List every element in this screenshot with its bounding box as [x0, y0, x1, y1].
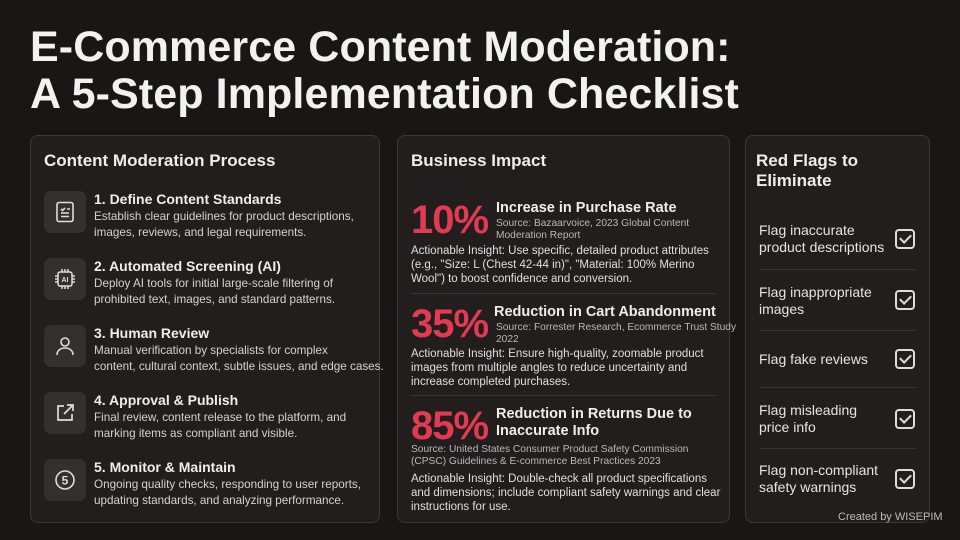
stat 35% [411, 302, 736, 388]
title [30, 23, 739, 118]
stat 85%: Actionable Insight: Double-check all product specifications [411, 473, 707, 485]
heading: impact: Business Impact [411, 151, 546, 170]
icon: circled 5: 5 [62, 474, 69, 488]
stat 85% [411, 404, 720, 513]
step 1: images, reviews, and legal requirements. [94, 226, 306, 238]
icon: person [44, 325, 86, 367]
title: E-Commerce Content Moderation: [30, 23, 731, 71]
step 4: 4. Approval & Publish [94, 392, 238, 408]
heading: process: Content Moderation Process [44, 151, 275, 170]
flag 2: images [759, 301, 804, 317]
stat 85%: instructions for use. [411, 501, 511, 513]
flag 2: Flag inappropriate [759, 284, 872, 300]
panel: business impact [397, 135, 730, 523]
step 5: Ongoing quality checks, responding to user reports, [94, 478, 361, 491]
panel: content moderation process [30, 135, 380, 523]
step 1: 1. Define Content Standards [94, 191, 281, 207]
heading: red flags: Red Flags to [756, 151, 858, 170]
step 2: Deploy AI tools for initial large-scale filtering of [94, 277, 333, 290]
flag 3 [759, 349, 915, 369]
step 3 [44, 325, 384, 372]
step 4 [44, 392, 346, 440]
step 2: prohibited text, images, and standard patterns. [94, 292, 335, 306]
stat 35%: Source: Forrester Research, Ecommerce Trust Study [496, 322, 736, 333]
stat 10%: 10% [411, 198, 488, 242]
flag 4 [759, 402, 915, 435]
stat 85%: Reduction in Returns Due to [496, 406, 692, 422]
step 5: 5. Monitor & Maintain [94, 459, 236, 475]
flag 1: product descriptions [759, 239, 884, 255]
step 3: 3. Human Review [94, 325, 209, 341]
step 1 [44, 191, 354, 238]
stat 10%: Actionable Insight: Use specific, detailed product attributes [411, 245, 709, 257]
icon: AI chip: AI [62, 277, 69, 284]
flag 5 [759, 462, 915, 495]
stat 35%: Reduction in Cart Abandonment [494, 304, 716, 320]
step 3: content, cultural context, subtle issues, and edge cases. [94, 360, 384, 372]
icon: external link [44, 392, 86, 434]
step 5 [44, 459, 361, 506]
stat 10%: Moderation Report [496, 230, 580, 241]
flag 1 [759, 222, 915, 255]
flag 4: price info [759, 419, 816, 435]
step 4: marking items as compliant and visible. [94, 426, 297, 440]
step 2: 2. Automated Screening (AI) [94, 258, 281, 274]
credit: Created by WISEPIM [838, 511, 943, 523]
step 3: Manual verification by specialists for complex [94, 344, 328, 357]
stat 10%: Increase in Purchase Rate [496, 200, 677, 216]
step 1: Establish clear guidelines for product descriptions, [94, 210, 354, 223]
stat 35%: Actionable Insight: Ensure high-quality, zoomable product [411, 348, 704, 360]
heading: red flags [756, 151, 858, 190]
flag 5: safety warnings [759, 479, 856, 495]
stat 35%: 2022 [496, 334, 519, 345]
step 2 [44, 258, 335, 306]
stat 10%: Wool") to boost confidence and conversion. [411, 273, 632, 285]
stat 35%: images from multiple angles to reduce uncertainty and [411, 362, 687, 374]
title: A 5-Step Implementation Checklist [30, 70, 739, 118]
flag 4: Flag misleading [759, 402, 857, 418]
stat 35%: increase completed purchases. [411, 376, 570, 388]
stat 10% [411, 198, 709, 285]
stat 85%: Inaccurate Info [496, 423, 599, 439]
flag 3: Flag fake reviews [759, 351, 868, 367]
icon: circled 5 [44, 459, 86, 501]
flag 5: Flag non-compliant [759, 462, 878, 478]
stat 10%: Source: Bazaarvoice, 2023 Global Content [496, 218, 689, 229]
stat 85%: Source: United States Consumer Product Safety Commission [411, 444, 688, 455]
stat 10%: (e.g., "Size: L (Chest 42-44 in)", "Material: 100% Merino [411, 259, 694, 271]
flag 2 [759, 284, 915, 317]
flag 1: Flag inaccurate [759, 222, 855, 238]
stat 85%: 85% [411, 404, 488, 448]
step 4: Final review, content release to the platform, and [94, 411, 346, 424]
panel: red flags [745, 135, 930, 523]
heading: red flags: Eliminate [756, 171, 832, 190]
icon: AI chip [44, 258, 86, 300]
icon: document [44, 191, 86, 233]
stat 85%: (CPSC) Guidelines & E-commerce Best Practices 2023 [411, 456, 661, 467]
stat 35%: 35% [411, 302, 488, 346]
step 5: updating standards, and analyzing performance. [94, 494, 344, 506]
stat 85%: and dimensions; include compliant safety warnings and clear [411, 487, 720, 499]
